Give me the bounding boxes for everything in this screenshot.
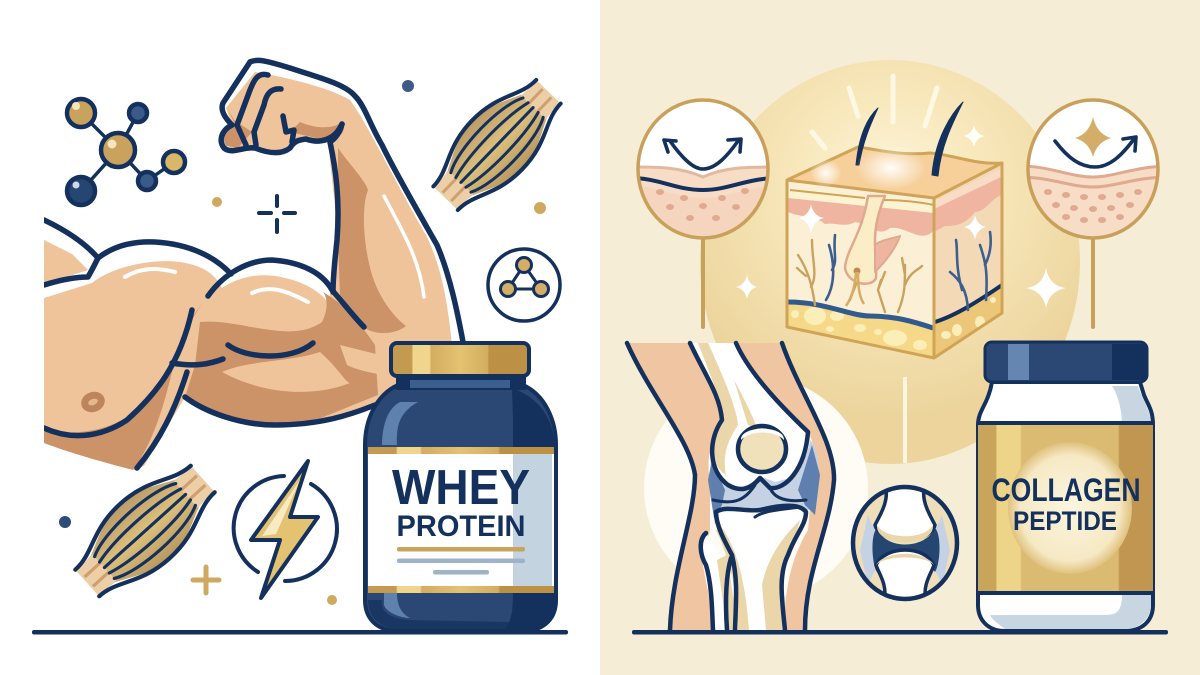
- gold label: [978, 423, 1153, 593]
- vessel band: [788, 302, 933, 328]
- icon: molecule: [67, 99, 185, 205]
- femur: [690, 343, 809, 490]
- lid: [391, 343, 529, 376]
- icon: crosshair sparkle: [259, 196, 295, 232]
- epidermis: [788, 190, 934, 236]
- rays above skin block: [812, 76, 937, 148]
- label: [368, 447, 554, 593]
- illustration: skin cross-section block: [787, 102, 1002, 358]
- label lines: [397, 547, 525, 574]
- jar body: [978, 382, 1153, 631]
- left face: [787, 180, 934, 358]
- neck: [396, 374, 526, 390]
- tibia: [716, 506, 806, 630]
- jar: collagen peptide: [978, 342, 1153, 631]
- label text: COLLAGEN: COLLAGEN: [992, 472, 1140, 508]
- fibula: [701, 533, 727, 630]
- icon: network circle: [488, 249, 560, 321]
- top face: [787, 147, 1002, 198]
- outlines: [627, 343, 834, 630]
- jar body: [365, 385, 556, 631]
- icon: joint magnifier: [850, 485, 960, 605]
- skin: [627, 343, 724, 630]
- illustration: flexed arm and torso: [44, 60, 463, 470]
- cartilage blue: [710, 440, 819, 525]
- icon: muscle fibre top right: [420, 67, 574, 223]
- label text: PROTEIN: PROTEIN: [396, 510, 526, 543]
- fat layer: [787, 300, 934, 358]
- nipple: [81, 392, 105, 412]
- bicep and chest shadow: [185, 292, 378, 424]
- forearm shadow: [338, 148, 406, 333]
- icon: muscle fibre bottom left: [63, 452, 227, 610]
- vessels: [797, 240, 922, 312]
- jar: whey protein: [365, 343, 556, 631]
- patella: [738, 426, 786, 472]
- decorative dots, left: [59, 80, 546, 605]
- highlights: [384, 196, 424, 297]
- baseline left: [32, 630, 568, 634]
- outlines: [44, 60, 463, 468]
- panel: white whey background: [0, 0, 600, 675]
- label text: WHEY: WHEY: [392, 461, 530, 515]
- callout: right skin magnifier: [1020, 100, 1170, 329]
- vertical divider line: [903, 377, 907, 463]
- hair strands: [856, 108, 878, 165]
- arrows: [664, 139, 741, 169]
- hair follicle: [845, 196, 885, 284]
- white circle behind knee: [644, 376, 868, 600]
- icon: lightning bolt in ring: [234, 461, 337, 598]
- right face: [934, 163, 1002, 358]
- skin shine: [855, 146, 927, 190]
- sparkles around skin block: [736, 125, 1066, 308]
- illustration: knee joint: [627, 343, 834, 630]
- block outlines: [787, 147, 1002, 358]
- lid: [985, 342, 1147, 382]
- icon: gold plus: [193, 567, 219, 593]
- panel: cream collagen background: [600, 0, 1200, 675]
- background glow circle: [700, 60, 1080, 464]
- callout: left skin magnifier: [630, 100, 780, 329]
- label text: PEPTIDE: PEPTIDE: [1013, 506, 1117, 536]
- baseline right: [632, 630, 1168, 634]
